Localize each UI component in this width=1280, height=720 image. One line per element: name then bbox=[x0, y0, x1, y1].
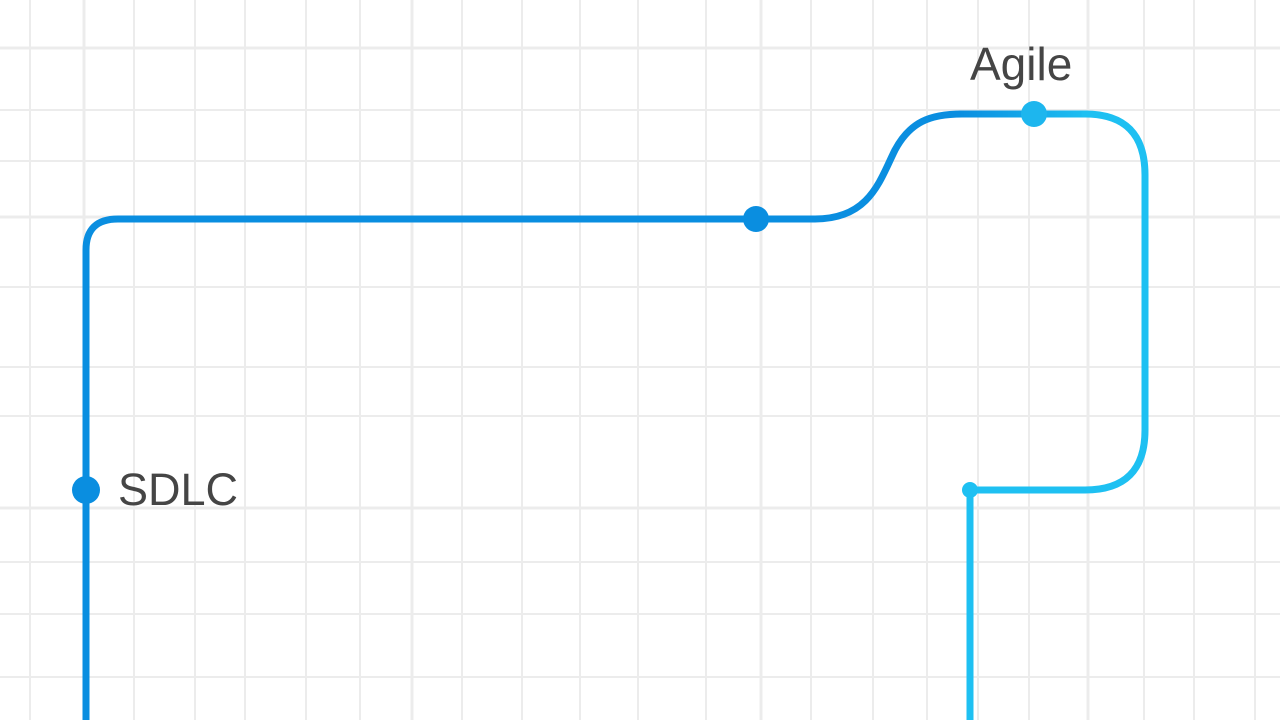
path: SDLC to Agile line bbox=[86, 114, 1145, 720]
dot: SDLC node bbox=[72, 476, 100, 504]
label: Agile: Agile bbox=[970, 38, 1072, 90]
dot: lower node bbox=[962, 482, 978, 498]
label: SDLC: SDLC bbox=[118, 464, 238, 515]
dot: Agile node bbox=[1021, 101, 1047, 127]
dot: mid node bbox=[743, 206, 769, 232]
